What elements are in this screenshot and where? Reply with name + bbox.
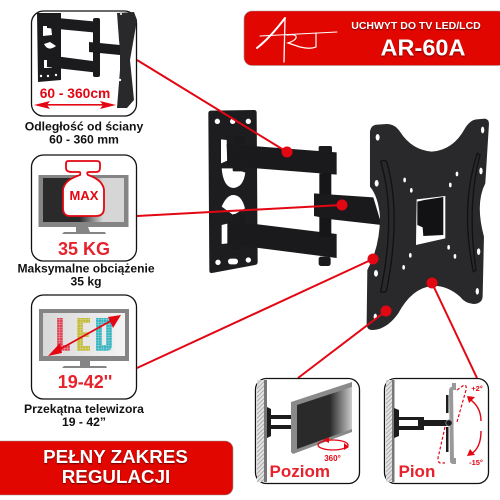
- miniature mount: [37, 12, 137, 108]
- label: Pion: [398, 462, 435, 481]
- load value: 35 KG: [58, 239, 110, 259]
- tilt labels: +2°: [471, 384, 483, 393]
- LED TV icon: [39, 309, 129, 368]
- leader lines: [137, 60, 477, 378]
- panel: horizontal adjustment: [256, 378, 360, 484]
- bottom banner: [0, 441, 233, 495]
- callout dots: [282, 146, 438, 316]
- banner text: PEŁNY ZAKRES: [43, 446, 188, 467]
- panel: distance from wall: [32, 11, 137, 116]
- top header banner: [244, 11, 500, 66]
- TV bracket plate: [367, 119, 489, 330]
- arm: [267, 407, 292, 438]
- swing arms: [227, 136, 382, 266]
- panel: screen size: [32, 295, 136, 399]
- caption: distance: Odległość od ściany: [25, 120, 143, 134]
- label: Poziom: [270, 462, 330, 481]
- size value: 19-42'': [58, 372, 112, 392]
- tilt outlines: [438, 385, 466, 463]
- caption: max load: Maksymalne obciążenie: [17, 262, 155, 276]
- TV: [291, 382, 352, 454]
- weight icon: MAX: [70, 188, 99, 203]
- caption: distance: 60 - 360 mm: [49, 132, 119, 146]
- panel: vertical adjustment: [384, 378, 488, 484]
- arm: [394, 408, 424, 438]
- caption: screen size: Przekątna telewizora: [24, 402, 144, 416]
- banner text: REGULACJI: [62, 466, 170, 487]
- panel: max load: [32, 155, 136, 261]
- TV icon: [38, 175, 128, 234]
- TV side: [449, 387, 454, 464]
- distance label: 60 - 360cm: [40, 86, 110, 101]
- wall mount product: [208, 110, 489, 330]
- wall: [257, 380, 264, 482]
- wall: [386, 380, 392, 482]
- distance arrow: [34, 101, 116, 109]
- ART logo: [257, 18, 337, 62]
- rotation arrows: [318, 440, 348, 450]
- caption: screen size: 19 - 42”: [62, 415, 106, 429]
- caption: max load: 35 kg: [71, 274, 101, 288]
- tilt arrows: [468, 398, 481, 454]
- panel: vertical adjustment: -15°: [469, 458, 483, 467]
- model name: AR-60A: [381, 34, 465, 60]
- header subtitle: UCHWYT DO TV LED/LCD: [351, 20, 481, 32]
- wall plate: [208, 110, 258, 273]
- rotation label: 360°: [324, 454, 341, 463]
